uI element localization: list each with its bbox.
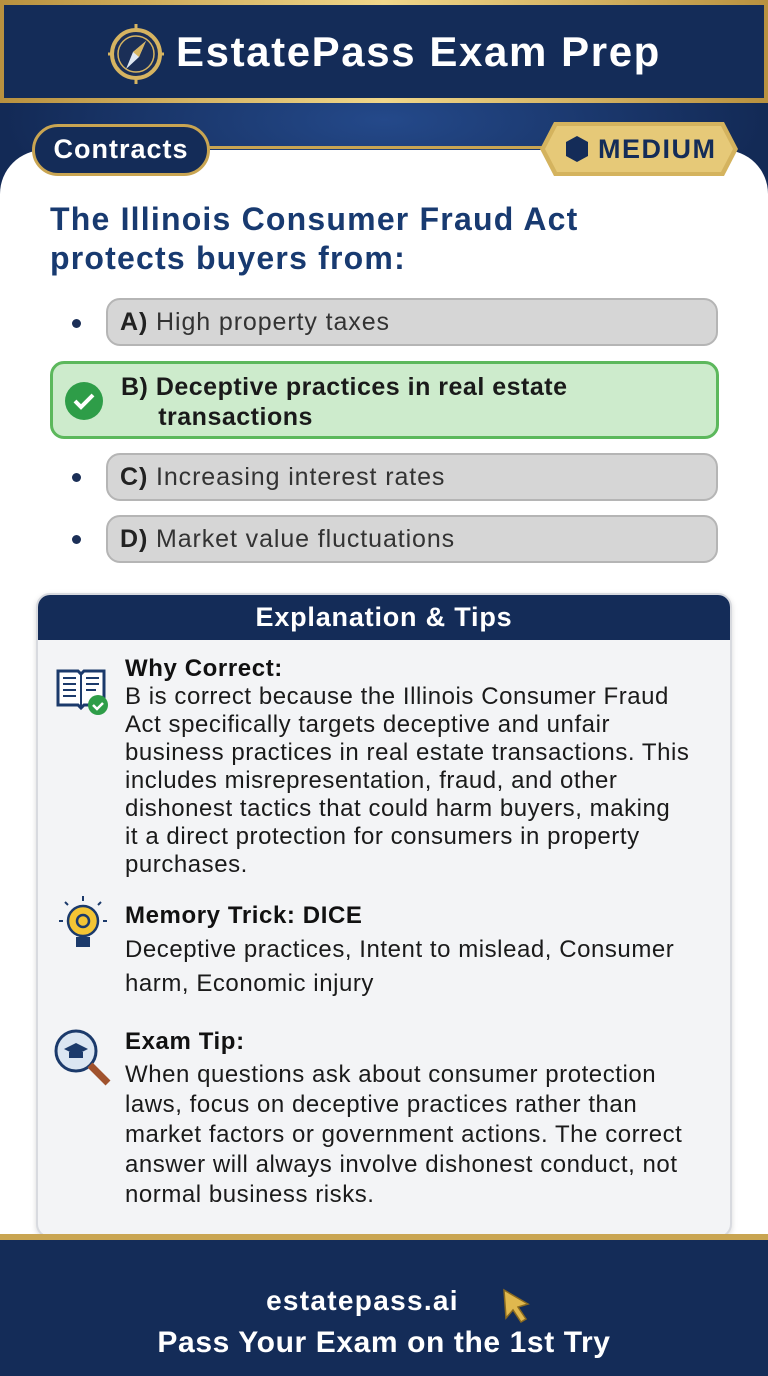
difficulty badge: MEDIUM: MEDIUM [598,134,716,164]
text: C) Increasing interest rates [120,463,445,491]
why correct: dishonest tactics that could harm buyers, making [125,795,670,822]
exam tip [125,1028,682,1208]
difficulty badge: MEDIUM [540,122,738,176]
panel header: Explanation & Tips [256,602,512,632]
text: A) High property taxes [120,308,390,336]
question: protects buyers from: [50,240,406,276]
footer [0,1234,768,1376]
option B (correct): B) Deceptive practices in real estate [121,373,567,401]
why correct: Why Correct: [125,655,283,682]
option B (correct): transactions [158,403,313,431]
option D [72,535,81,544]
header background [0,0,768,200]
question: The Illinois Consumer Fraud Act [50,201,579,237]
option B (correct) [50,361,719,439]
why correct [125,655,689,878]
exam tip: When questions ask about consumer protection [125,1061,656,1088]
why correct: it a direct protection for consumers in property [125,823,640,850]
explanation panel [36,593,732,1238]
footer url: estatepass.ai [266,1285,459,1316]
icon: compass [108,24,164,84]
icon: lightbulb [59,896,107,947]
exam tip: Exam Tip: [125,1028,245,1055]
gold line [200,146,560,149]
exam tip: laws, focus on deceptive practices rather than [125,1091,637,1118]
tagline: Pass Your Exam on the 1st Try [157,1326,611,1359]
icon: magnifier [54,1030,110,1086]
why correct: Act specifically targets deceptive and unfair [125,711,610,738]
exam tip: normal business risks. [125,1181,375,1208]
memory trick: Memory Trick: DICE [125,902,363,929]
text: D) Market value fluctuations [120,525,455,553]
option C [72,473,81,482]
memory trick [125,902,674,997]
memory trick: Deceptive practices, Intent to mislead, Consumer [125,936,674,963]
white card [0,150,768,1240]
option A [72,319,81,328]
icon: check [65,382,103,420]
category pill: Contracts [32,124,210,176]
category pill: Contracts: Contracts [53,134,189,164]
panel header [38,595,730,640]
why correct: includes misrepresentation, fraud, and other [125,767,617,794]
memory trick: harm, Economic injury [125,970,374,997]
exam tip: answer will always involve dishonest conduct, not [125,1151,678,1178]
why correct: purchases. [125,851,248,878]
question [50,201,579,276]
title: EstatePass Exam Prep [176,28,661,75]
why correct: B is correct because the Illinois Consumer Fraud [125,683,669,710]
why correct: business practices in real estate transactions. This [125,739,689,766]
exam tip: market factors or government actions. The correct [125,1121,682,1148]
header banner [0,0,768,103]
icon: cursor [503,1288,530,1323]
icon: book [56,670,108,715]
